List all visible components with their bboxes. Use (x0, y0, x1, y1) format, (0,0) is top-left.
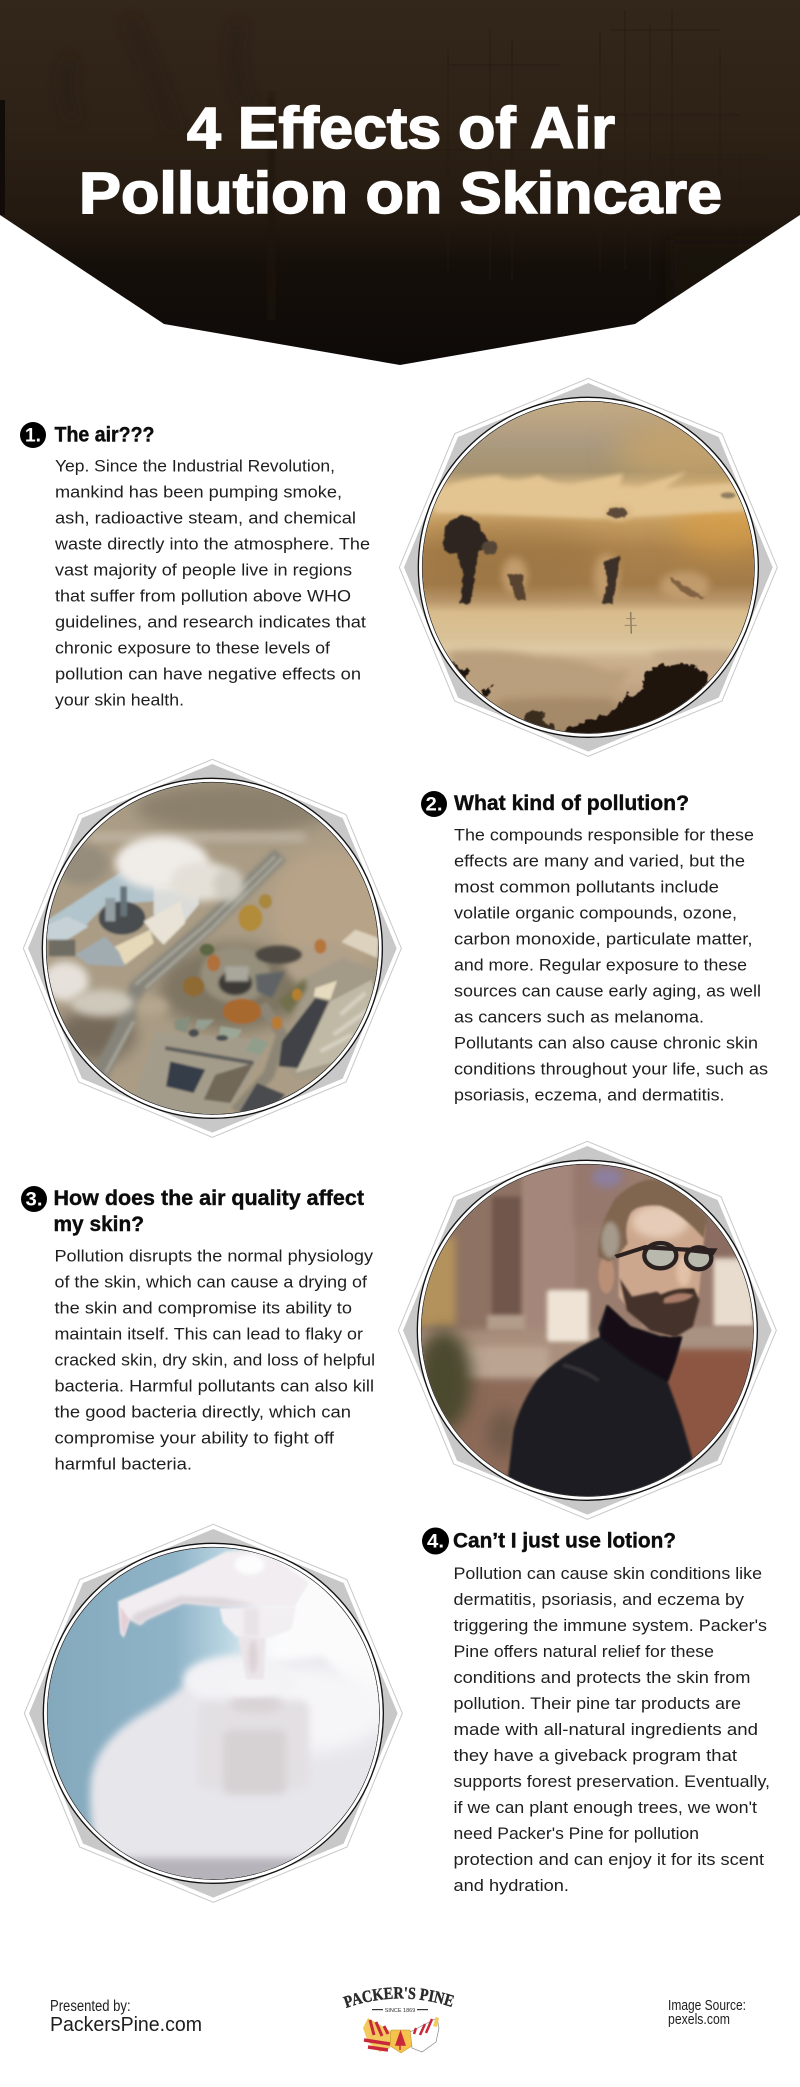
logo crest (363, 2017, 439, 2053)
body text 3: compromise your ability to fight off (54, 1429, 334, 1448)
body text 2: as cancers such as melanoma. (454, 1008, 704, 1027)
body text 2: sources can cause early aging, as well (454, 982, 761, 1001)
body text 1: your skin health. (55, 691, 184, 710)
body text 3: maintain itself. This can lead to flaky or (54, 1325, 363, 1344)
section 4: can't I just use lotion (422, 1528, 770, 1895)
number badge 2: 2. (426, 794, 442, 816)
body text 2: most common pollutants include (454, 878, 719, 897)
number badge 2 (421, 791, 447, 817)
body text 2: psoriasis, eczema, and dermatitis. (454, 1086, 724, 1105)
body text 4: made with all-natural ingredients and (454, 1720, 758, 1739)
body text 1: pollution can have negative effects on (55, 665, 361, 684)
body text 4: need Packer's Pine for pollution (454, 1824, 699, 1843)
footer: presented by (50, 1998, 202, 2036)
title: Pollution on Skincare (79, 161, 722, 226)
number badge 3: 3. (26, 1190, 42, 1210)
head (598, 1257, 614, 1293)
body text 2: Pollutants can also cause chronic skin (454, 1034, 758, 1053)
heading 2: What kind of pollution? (454, 792, 689, 815)
title (79, 96, 722, 226)
footer: presented by: PackersPine.com (50, 2013, 202, 2036)
section 3: how does the air quality affect my skin (21, 1186, 375, 1474)
heading 3: my skin? (54, 1213, 144, 1236)
pump collar and column (199, 1698, 310, 1768)
pump nozzle (118, 1550, 309, 1638)
body text 4: supports forest preservation. Eventually, (454, 1772, 770, 1791)
body text 3: Pollution disrupts the normal physiology (54, 1247, 374, 1266)
heading 4: Can’t I just use lotion? (453, 1530, 676, 1553)
footer: image source: Image Source: (668, 1998, 746, 2014)
body text 1: chronic exposure to these levels of (55, 639, 330, 658)
number badge 3 (21, 1186, 47, 1212)
body text 3: cracked skin, dry skin, and loss of helpful (54, 1351, 375, 1370)
footer: Packer's Pine logo (342, 1987, 454, 2054)
title: 4 Effects of Air (187, 96, 615, 161)
body text 2: effects are many and varied, but the (454, 852, 745, 871)
road (100, 855, 280, 1075)
body text 1: vast majority of people live in regions (55, 561, 352, 580)
body text 1: guidelines, and research indicates that (55, 613, 366, 632)
photo 1: smokestacks at sunset in octagon frame (399, 378, 777, 756)
body text 4: pollution. Their pine tar products are (454, 1694, 741, 1713)
footer: image source: pexels.com (668, 2012, 730, 2028)
body text 4: Pine offers natural relief for these (454, 1642, 714, 1661)
pump stem (238, 1636, 266, 1679)
body text 3: bacteria. Harmful pollutants can also kill (54, 1377, 374, 1396)
body text 4: Pollution can cause skin conditions like (454, 1564, 762, 1583)
body text 4 (454, 1564, 770, 1895)
body text 2: volatile organic compounds, ozone, (454, 904, 737, 923)
number badge 4 (422, 1528, 449, 1554)
photo 2: aerial factory in octagon frame (23, 759, 401, 1137)
footer: image source (668, 1998, 746, 2028)
section 2: what kind of pollution (421, 791, 768, 1105)
neck (600, 1305, 682, 1382)
body text 1: Yep. Since the Industrial Revolution, (55, 457, 335, 476)
building complex (47, 872, 155, 940)
body text 3: the skin and compromise its ability to (54, 1299, 352, 1318)
body text 3 (54, 1247, 375, 1474)
body text 1 (54, 457, 370, 710)
blurred street background (422, 1177, 524, 1328)
body text 4: triggering the immune system. Packer's (454, 1616, 767, 1635)
heading 1: The air??? (54, 424, 154, 447)
body text 4: protection and can enjoy it for its scent (454, 1850, 764, 1869)
lower buildings and lots (198, 1036, 248, 1044)
body text 4: conditions and protects the skin from (454, 1668, 750, 1687)
photo 3: man in black turtleneck in octagon frame (398, 1141, 776, 1519)
trees (238, 905, 262, 931)
photo 4: lotion pump bottle in octagon frame (24, 1524, 402, 1902)
body text 4: dermatitis, psoriasis, and eczema by (454, 1590, 745, 1609)
number badge 1: 1. (25, 426, 41, 446)
body text 4: they have a giveback program that (454, 1746, 737, 1765)
footer: Packer's Pine logo: PACKER'S PINE (342, 1987, 454, 2008)
plaza (200, 946, 270, 1003)
body text 2: The compounds responsible for these (454, 826, 754, 845)
sweater (505, 1305, 695, 1500)
body text 4: and hydration. (454, 1876, 569, 1895)
footer: Packer's Pine logo: SINCE 1869 (385, 2008, 415, 2014)
body text 1: ash, radioactive steam, and chemical (55, 509, 356, 528)
body text 2: and more. Regular exposure to these (454, 956, 747, 975)
header banner (0, 0, 800, 365)
body text 1: mankind has been pumping smoke, (55, 483, 342, 502)
beard (620, 1278, 700, 1337)
heading 3 (54, 1187, 364, 1236)
number badge 4: 4. (427, 1532, 444, 1552)
body text 3: harmful bacteria. (54, 1455, 192, 1474)
body text 4: if we can plant enough trees, we won't (454, 1798, 757, 1817)
body text 3: the good bacteria directly, which can (54, 1403, 351, 1422)
section 1: the air (20, 422, 370, 710)
glasses (614, 1243, 718, 1269)
body text 3: of the skin, which can cause a drying of (54, 1273, 367, 1292)
body text 2: carbon monoxide, particulate matter, (454, 930, 752, 949)
body text 1: waste directly into the atmosphere. The (54, 535, 370, 554)
number badge 1 (20, 422, 46, 448)
heading 3: How does the air quality affect (54, 1187, 364, 1210)
body text 1: that suffer from pollution above WHO (55, 587, 351, 606)
footer: presented by: Presented by: (50, 1998, 131, 2015)
body text 2: conditions throughout your life, such as (454, 1060, 768, 1079)
dark strip and pale lot (279, 998, 329, 1068)
body text 2 (454, 826, 768, 1105)
smoke plumes (115, 836, 209, 890)
